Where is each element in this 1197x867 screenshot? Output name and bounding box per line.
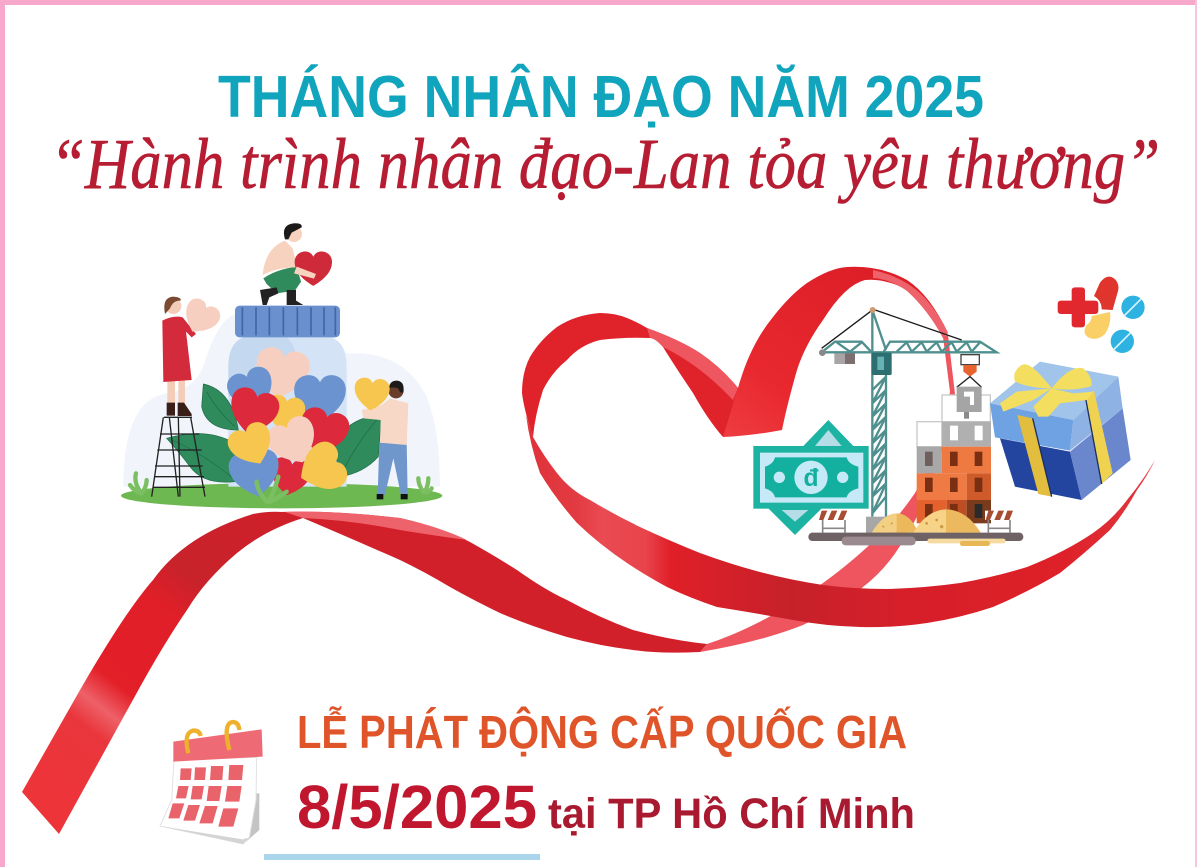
crane cab <box>872 353 892 375</box>
calendar header <box>173 729 263 762</box>
illustration: gift box <box>990 362 1131 500</box>
gift bow <box>1000 364 1093 417</box>
man hair <box>284 223 302 239</box>
ribbon: heart fold highlight <box>647 328 738 400</box>
man pants <box>263 267 301 293</box>
jar lid <box>235 306 340 337</box>
woman legs <box>167 380 185 405</box>
ribbon: back pink band <box>700 335 955 652</box>
woman head <box>165 298 181 314</box>
ladder <box>152 417 205 497</box>
event date: 8/5/2025 <box>297 773 537 841</box>
grass tufts <box>130 473 432 493</box>
ground <box>121 483 442 508</box>
calendar cells <box>168 765 243 827</box>
ribbon: wave to the crossing <box>280 512 707 653</box>
heart held by man <box>295 252 332 286</box>
illustration: construction crane and building <box>808 307 1023 546</box>
ribbon: heart right lobe <box>723 267 948 437</box>
illustration: people filling a heart jar <box>121 223 442 508</box>
event location: tại TP Hồ Chí Minh <box>548 790 915 838</box>
red ribbon <box>22 267 1155 834</box>
red cross <box>1058 287 1098 327</box>
jar body <box>228 337 347 487</box>
ribbon: wave highlight <box>285 512 467 540</box>
calendar back pages <box>240 793 259 843</box>
leaves <box>167 384 382 482</box>
crane base block <box>866 517 889 533</box>
calendar page <box>160 757 257 844</box>
ribbon: heart left lobe <box>522 313 745 437</box>
event heading: LỄ PHÁT ĐỘNG CẤP QUỐC GIA <box>297 706 907 758</box>
man torso <box>263 241 297 275</box>
gift lid <box>990 362 1118 420</box>
ribbon: main sweep to the right <box>526 415 1155 627</box>
man kneeling on jar <box>260 223 332 305</box>
woman hair <box>164 297 181 314</box>
building <box>917 395 991 523</box>
yellow heart <box>353 377 390 412</box>
hanging block <box>957 387 982 419</box>
woman boots <box>167 403 192 416</box>
gift ribbon <box>1017 391 1113 497</box>
sand piles <box>872 509 981 539</box>
grass in front of the jar <box>257 477 287 502</box>
woman on ladder <box>152 295 224 497</box>
pale background shape <box>123 307 440 487</box>
man shirt <box>362 398 408 445</box>
ribbon: tail arch <box>22 512 303 834</box>
man arm <box>294 267 316 279</box>
road barriers <box>819 511 1014 533</box>
blue divider bar <box>264 854 540 860</box>
man boots <box>260 287 303 305</box>
crane <box>819 307 997 533</box>
crane counterweight <box>834 353 855 364</box>
calendar rings <box>187 722 239 753</box>
man at right with yellow heart <box>353 377 408 499</box>
crane jib <box>822 342 997 352</box>
heart held by woman <box>177 295 224 340</box>
crane cables <box>822 309 962 348</box>
ribbon: right lobe highlight <box>873 270 948 338</box>
man head <box>388 383 404 398</box>
icon: medical cross and pills <box>1058 277 1145 353</box>
title: THÁNG NHÂN ĐẠO NĂM 2025 <box>218 63 984 130</box>
blue pills <box>1121 296 1145 319</box>
man hair <box>389 381 404 393</box>
capsule <box>1094 277 1118 310</box>
crane hook <box>957 355 982 387</box>
banknote centre <box>765 457 858 497</box>
calendar page lower edge <box>160 826 249 844</box>
banknote band <box>768 420 853 535</box>
hearts in the jar <box>224 345 352 501</box>
man head <box>286 226 302 242</box>
ground slab <box>808 533 1023 546</box>
gift box sides <box>1000 438 1082 500</box>
dong sign: đ <box>803 465 819 492</box>
man shoes <box>377 494 408 499</box>
crane mast <box>872 310 886 517</box>
icon: banknote with dong sign <box>753 420 869 535</box>
icon: calendar <box>160 722 263 844</box>
man jeans <box>378 443 408 495</box>
woman dress <box>162 317 196 382</box>
jar shading <box>228 337 297 397</box>
